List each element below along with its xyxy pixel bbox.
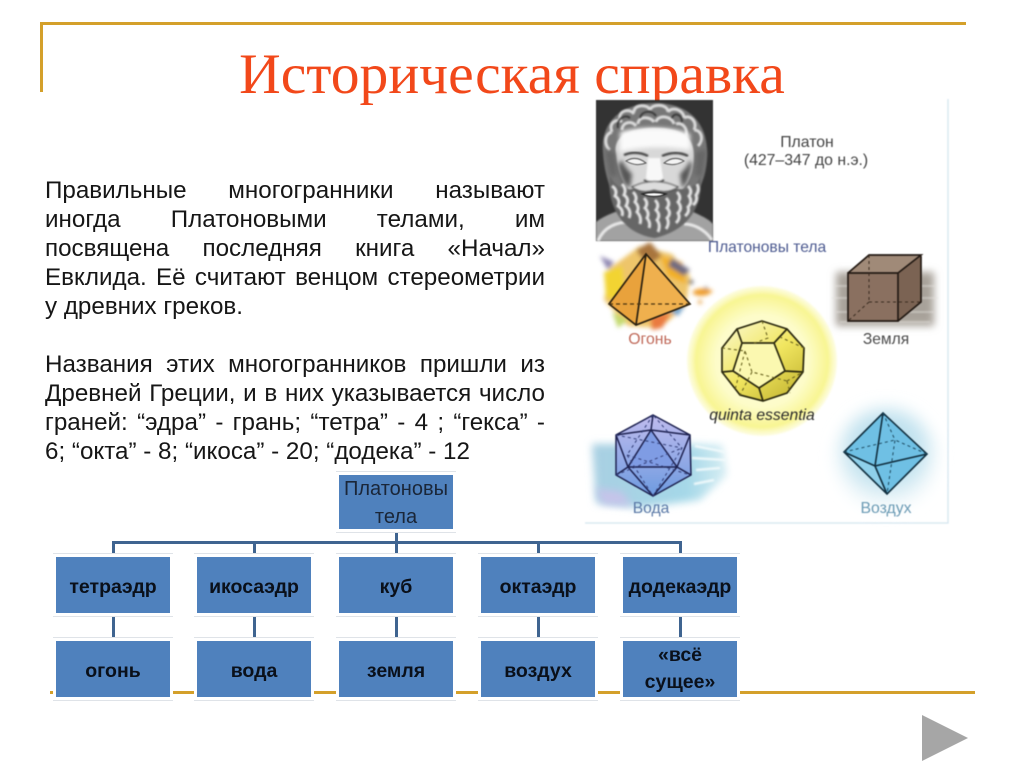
box: tetrahedron	[56, 557, 170, 613]
box: all that exists: «всё	[658, 644, 702, 666]
box: octahedron	[481, 557, 595, 613]
box: Platonic solids root	[339, 475, 453, 529]
caption: Plato	[744, 134, 868, 169]
bottom gold rule	[50, 691, 975, 694]
box: dodecahedron: додекаэдр	[629, 576, 731, 598]
text block: names origin: 6; “окта” - 8; “икоса” - 20; “додека” - 12	[45, 438, 470, 465]
box: icosahedron: икосаэдр	[209, 576, 299, 598]
text block: Platonic solids intro: посвящена последняя книга «Начал»	[45, 235, 545, 262]
text block: names origin	[45, 351, 545, 465]
box: octahedron: октаэдр	[500, 576, 576, 598]
box: air: воздух	[504, 660, 572, 682]
solid: icosahedron, water: Вода	[633, 500, 670, 517]
solid: octahedron, air	[836, 408, 936, 517]
title: Историческая справка	[239, 43, 785, 106]
box: Platonic solids root: тела	[375, 506, 417, 528]
solid: tetrahedron, fire: Огонь	[628, 331, 672, 348]
illustration: Plato and the Platonic solids	[584, 98, 949, 524]
box: air	[481, 641, 595, 697]
box: water: вода	[231, 660, 277, 682]
picture edge	[585, 99, 948, 523]
text block: names origin: Древней Греции, и в них указывается число	[45, 380, 545, 407]
text block: names origin: Названия этих многогранников пришли из	[45, 351, 545, 378]
text block: Platonic solids intro: иногда Платоновыми телами, им	[45, 206, 545, 233]
box: all that exists: сущее»	[645, 671, 715, 693]
text block: Platonic solids intro: Правильные многогранники называют	[45, 177, 545, 204]
solid: dodecahedron, quinta essentia: quinta essentia	[709, 407, 815, 424]
caption: Plato: (427–347 до н.э.)	[744, 152, 868, 169]
top and left gold frame	[40, 22, 966, 92]
text block: Platonic solids intro	[45, 177, 545, 320]
solid: icosahedron, water	[592, 415, 727, 517]
solid: cube, earth: Земля	[863, 331, 909, 348]
caption: Platonic solids: Платоновы тела	[708, 239, 826, 256]
box: tetrahedron: тетраэдр	[69, 576, 157, 598]
box: water	[197, 641, 311, 697]
box: dodecahedron	[623, 557, 737, 613]
org chart: Platonic solids	[53, 471, 740, 701]
arrow: next slide	[922, 715, 968, 761]
text block: Platonic solids intro: у древних греков.	[45, 293, 243, 320]
box: icosahedron	[197, 557, 311, 613]
solid: tetrahedron, fire	[600, 242, 713, 348]
solid: dodecahedron, quinta essentia	[687, 286, 837, 436]
connector: main bus	[112, 533, 682, 553]
caption: Plato: Платон	[780, 134, 834, 151]
box: cube: куб	[380, 576, 412, 598]
portrait of Plato	[596, 100, 713, 241]
solid: octahedron, air: Воздух	[860, 500, 912, 517]
solid: cube, earth	[832, 255, 938, 348]
box: all that exists	[623, 641, 737, 697]
box: fire	[56, 641, 170, 697]
box: earth: земля	[367, 660, 425, 682]
box: cube	[339, 557, 453, 613]
text block: names origin: граней: “эдра” - грань; “тетра” - 4 ; “гекса” -	[45, 409, 545, 436]
box: Platonic solids root: Платоновы	[344, 478, 448, 500]
box: earth	[339, 641, 453, 697]
text block: Platonic solids intro: Евклида. Её считают венцом стереометрии	[45, 264, 545, 291]
box: fire: огонь	[85, 660, 141, 682]
